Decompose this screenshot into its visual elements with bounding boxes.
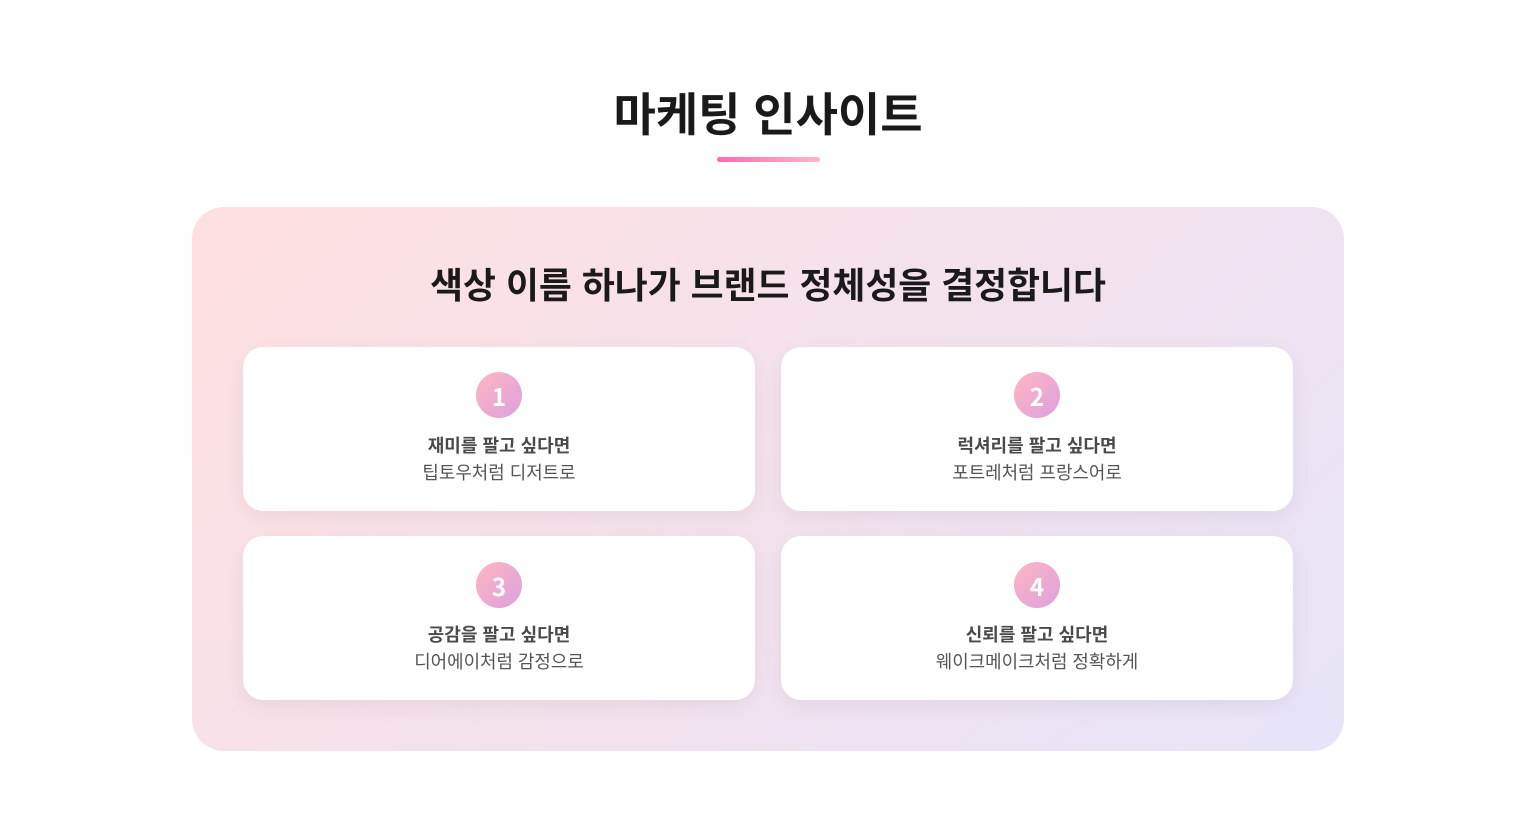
badge 3: 3 [492, 568, 506, 603]
panel heading: 색상 이름 하나가 브랜드 정체성을 결정합니다 [430, 257, 1106, 309]
card 1 heading: 재미를 팔고 싶다면 [428, 432, 570, 458]
card 2 heading: 럭셔리를 팔고 싶다면 [957, 432, 1117, 458]
badge 2: 2 [1030, 378, 1044, 413]
card 3 text: 디어에이처럼 감정으로 [414, 648, 584, 674]
card 2 text: 포트레처럼 프랑스어로 [952, 459, 1122, 485]
card 3 heading: 공감을 팔고 싶다면 [428, 621, 570, 647]
title underline [716, 157, 820, 162]
badge 2 [1014, 372, 1060, 418]
title: 마케팅 인사이트 [613, 79, 923, 145]
badge 1: 1 [492, 378, 506, 413]
panel: brand identity [192, 207, 1344, 751]
card 1 text: 팁토우처럼 디저트로 [422, 459, 576, 485]
badge 3 [476, 562, 522, 608]
badge 4: 4 [1030, 568, 1044, 603]
card 3 [243, 536, 755, 700]
badge 4 [1014, 562, 1060, 608]
badge 1 [476, 372, 522, 418]
card 4 [781, 536, 1293, 700]
card 2 [781, 347, 1293, 511]
card 4 heading: 신뢰를 팔고 싶다면 [966, 621, 1108, 647]
card 4 text: 웨이크메이크처럼 정확하게 [936, 648, 1138, 674]
card 1 [243, 347, 755, 511]
